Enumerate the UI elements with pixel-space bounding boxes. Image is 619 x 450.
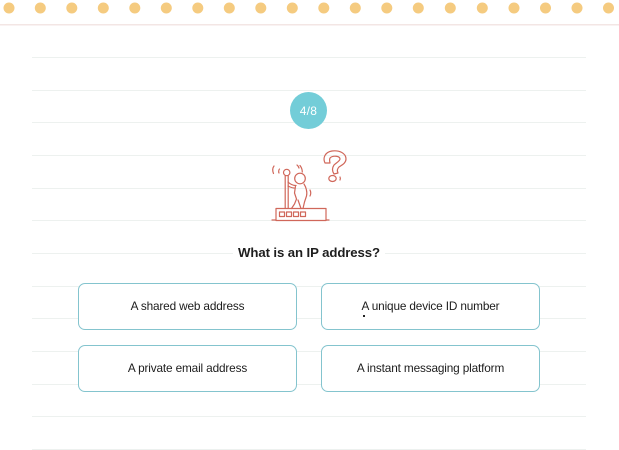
answer option: private email address: A private email address (128, 361, 247, 375)
person (288, 173, 311, 208)
header dotted band (0, 2, 619, 26)
progress badge: 4/8: 4/8 (300, 104, 317, 118)
answer option: private email address (78, 345, 297, 392)
answer option: shared web address: A shared web address (131, 299, 244, 313)
answer option: instant messaging platform: A instant messaging platform (357, 361, 504, 375)
question mark (324, 151, 346, 182)
question heading: What is an IP address? (238, 245, 380, 260)
icon: person at router with question mark (271, 150, 347, 222)
antenna (273, 165, 302, 208)
progress badge: 4/8 (290, 92, 327, 129)
answer option: instant messaging platform (321, 345, 540, 392)
answer option: shared web address (78, 283, 297, 330)
answer option: unique device ID number: A unique device ID number (362, 299, 499, 313)
router box (272, 208, 329, 220)
cursor speck (363, 315, 365, 317)
answer option: unique device ID number (321, 283, 540, 330)
